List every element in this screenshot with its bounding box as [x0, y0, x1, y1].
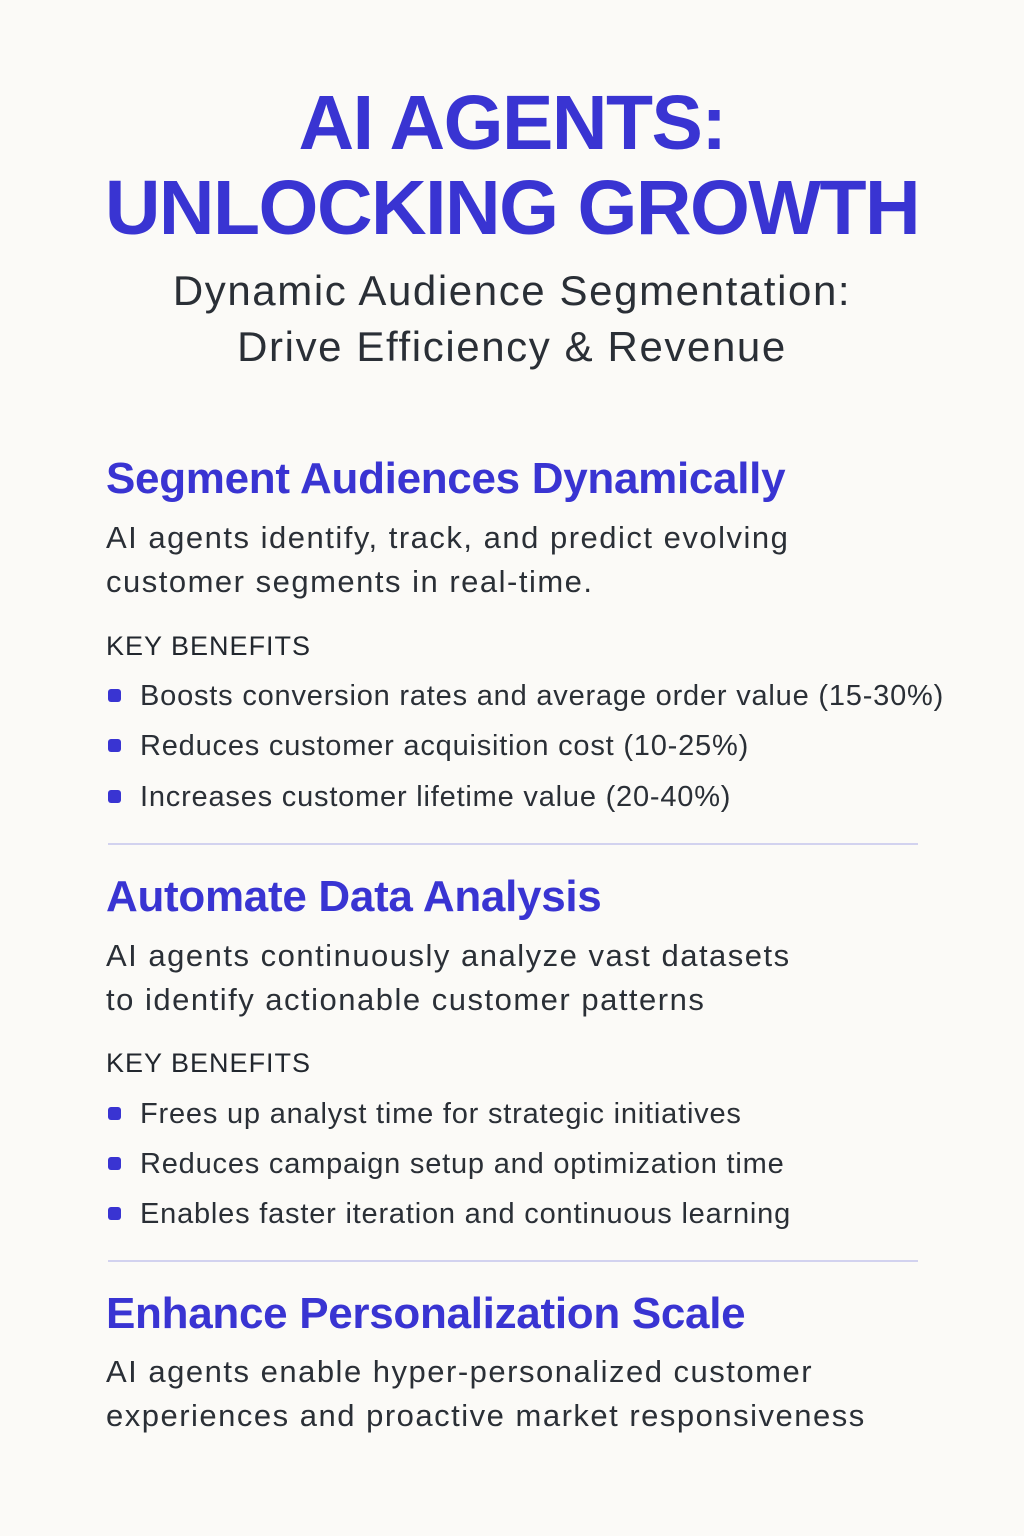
section: segment audiences: [106, 454, 944, 813]
subtitle: [173, 267, 851, 370]
title: [105, 80, 919, 251]
benefit list: [108, 680, 944, 813]
description: [106, 1354, 866, 1433]
key benefits label: KEY BENEFITS: [106, 1048, 311, 1078]
description: [106, 520, 789, 599]
subtitle: Dynamic Audience Segmentation:: [173, 267, 851, 314]
section: enhance personalization: [106, 1289, 866, 1433]
description: customer segments in real-time.: [106, 564, 594, 599]
benefit list: Enables faster iteration and continuous learning: [140, 1198, 791, 1230]
benefit list: Frees up analyst time for strategic initiatives: [140, 1098, 742, 1130]
description: AI agents identify, track, and predict evolving: [106, 520, 789, 555]
benefit list: Boosts conversion rates and average order value (15-30%): [140, 680, 944, 712]
description: to identify actionable customer patterns: [106, 982, 705, 1017]
title: UNLOCKING GROWTH: [105, 165, 919, 251]
description: experiences and proactive market responsiveness: [106, 1398, 866, 1433]
description: AI agents continuously analyze vast datasets: [106, 938, 791, 973]
benefit list: Reduces campaign setup and optimization time: [140, 1148, 785, 1180]
benefit list: Reduces customer acquisition cost (10-25%): [140, 730, 749, 762]
heading: Segment Audiences Dynamically: [106, 454, 785, 503]
key benefits label: KEY BENEFITS: [106, 631, 311, 661]
heading: Automate Data Analysis: [106, 872, 601, 921]
section: automate data analysis: [106, 872, 791, 1230]
benefit list: [108, 1098, 791, 1230]
benefit list: Increases customer lifetime value (20-40%): [140, 781, 731, 813]
description: AI agents enable hyper-personalized customer: [106, 1354, 813, 1389]
heading: Enhance Personalization Scale: [106, 1289, 745, 1338]
subtitle: Drive Efficiency & Revenue: [237, 323, 787, 370]
description: [106, 938, 791, 1017]
title: AI AGENTS:: [298, 80, 726, 166]
